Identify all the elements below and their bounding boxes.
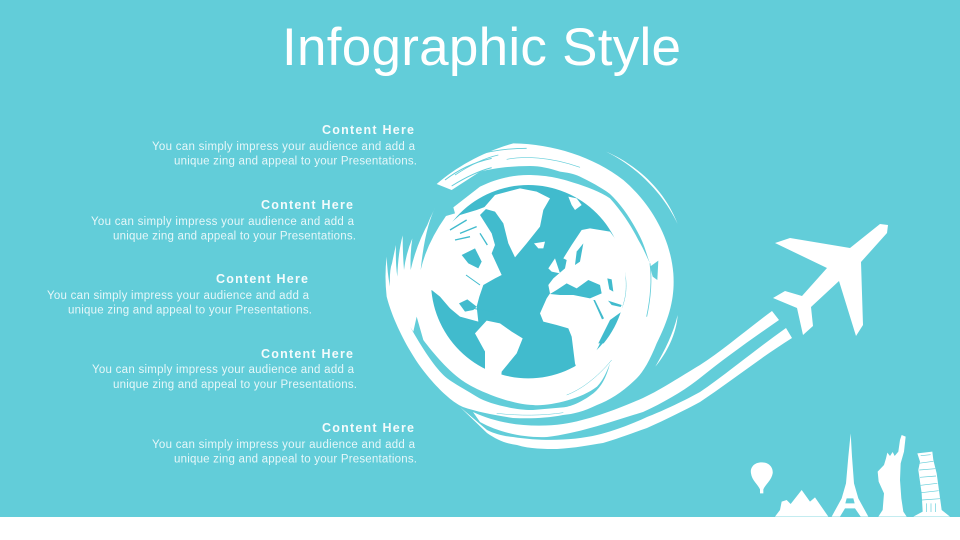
text block 2: unique zing and appeal to your Presentations. [113,230,356,242]
text block 4: You can simply impress your audience and add a [92,364,355,376]
text block 4: unique zing and appeal to your Presentations. [113,379,357,391]
text block 4 [92,347,357,391]
text block 5 [152,421,417,466]
text block 4: Content Here [261,347,353,361]
Greenland [483,188,550,257]
icon: Eiffel tower [832,433,868,517]
UK [548,258,560,273]
text block 5: Content Here [322,421,414,435]
lower right brush streak [655,315,678,367]
seas and inlets [431,244,622,369]
title: Infographic Style [282,18,681,77]
globe [431,185,626,378]
icon: pyramids and sphinx [775,490,828,517]
lower left gap [410,317,610,410]
brush slits [445,148,651,415]
icon: hot air balloon [751,462,773,493]
text block 5: You can simply impress your audience and add a [152,439,416,451]
text block 5: unique zing and appeal to your Presentations. [174,454,417,466]
text block 1: You can simply impress your audience and add a [152,141,416,153]
contrails [460,311,792,449]
ground band [0,517,960,540]
brush ring and globe [385,143,678,418]
Svalbard [568,197,582,210]
Eurasia and Africa [540,228,626,366]
text block 3 [47,272,312,316]
icon: Leaning tower of Pisa [913,452,950,517]
upper right brush streak [606,152,678,224]
text block 2: Content Here [261,198,353,212]
text block 1: Content Here [322,123,414,137]
icon: airplane [773,224,888,336]
Iceland [534,242,545,248]
North America [428,205,502,322]
text block 2: You can simply impress your audience and add a [91,216,355,228]
skyline [751,433,950,517]
brush ring [385,143,674,418]
text block 3: Content Here [216,272,308,286]
text block 2 [91,198,356,242]
text block 1 [152,123,417,168]
icon: Statue of Liberty [878,435,907,517]
text block 3: unique zing and appeal to your Presentations. [68,304,312,316]
right wedge [650,261,658,280]
South America [475,320,523,374]
text block 3: You can simply impress your audience and add a [47,290,310,302]
text block 1: unique zing and appeal to your Presentations. [174,156,417,168]
